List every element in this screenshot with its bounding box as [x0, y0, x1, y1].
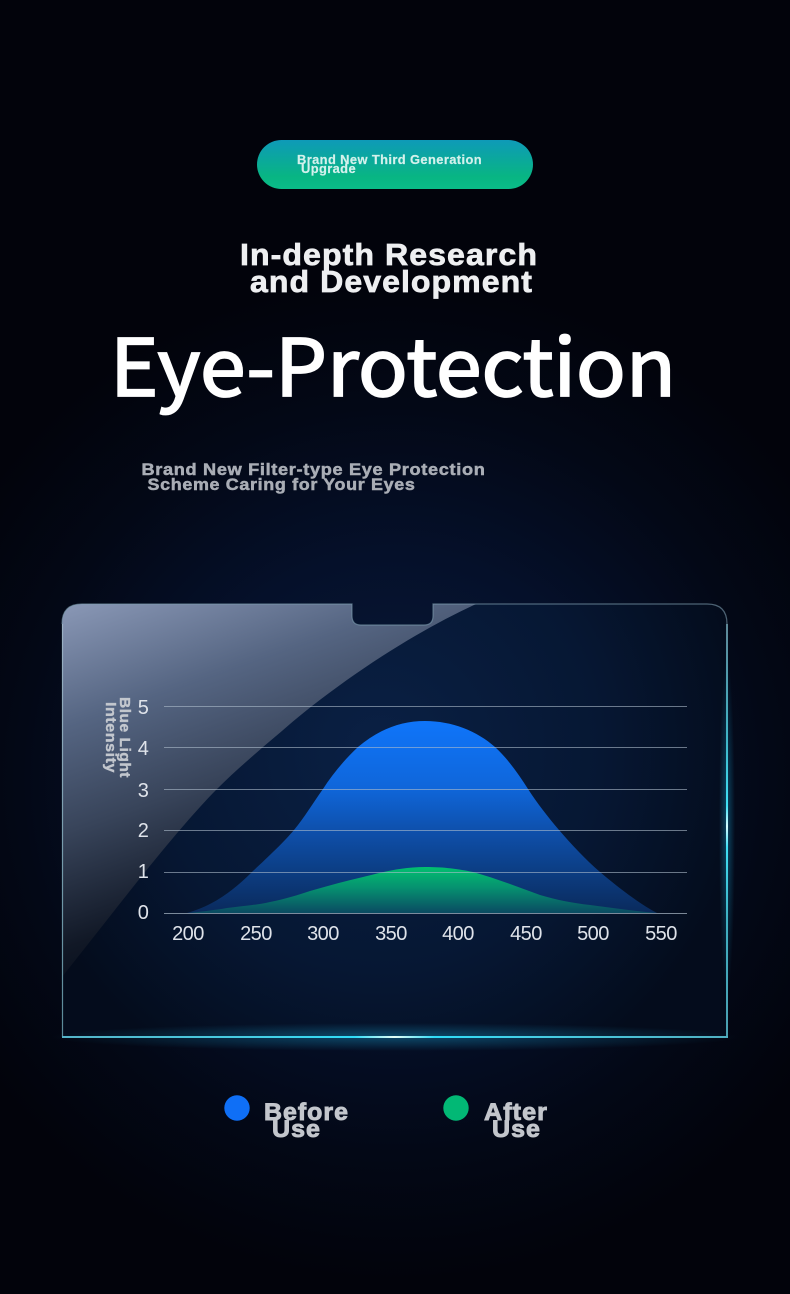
grid line 0	[164, 912, 687, 914]
title: eye-protection: Eye-Protection	[110, 304, 676, 419]
grid line 1	[164, 872, 687, 874]
y axis title	[102, 697, 133, 778]
x axis labels: 300	[307, 923, 339, 945]
legend: before use: Before	[264, 1099, 349, 1126]
x axis labels: 500	[577, 923, 609, 945]
x axis labels: 400	[442, 923, 474, 945]
grid line 4	[164, 746, 687, 748]
screen outline left	[62, 624, 64, 1037]
legend: after use	[443, 1095, 548, 1143]
panel: screen with chart	[50, 604, 740, 1051]
legend: before use	[224, 1095, 349, 1143]
y axis labels: 0	[138, 902, 149, 924]
legend: after use: Use	[492, 1116, 541, 1143]
y axis labels: 5	[138, 697, 149, 719]
area: before use	[187, 721, 657, 913]
subtitle: Brand New Filter-type Eye Protection	[142, 461, 486, 479]
heading: in-depth research and development	[240, 237, 538, 299]
area chart	[102, 697, 687, 945]
x axis labels: 200	[172, 923, 204, 945]
x axis labels: 450	[510, 923, 542, 945]
screen outline top	[62, 604, 727, 625]
y axis labels: 3	[138, 780, 149, 802]
x axis labels: 550	[645, 923, 677, 945]
heading: in-depth research and development: and Development	[250, 264, 533, 299]
y axis title: Intensity	[102, 702, 119, 773]
screen outline right	[726, 624, 728, 1038]
screen outline bottom	[62, 1036, 728, 1038]
badge: third generation upgrade	[257, 140, 533, 189]
subtitle	[142, 461, 486, 494]
area: after use	[190, 867, 657, 913]
subtitle: Scheme Caring for Your Eyes	[148, 476, 416, 494]
y axis labels: 4	[138, 738, 149, 760]
grid line 5	[164, 706, 687, 708]
bottom edge glow	[50, 1023, 740, 1051]
right edge glow	[719, 656, 735, 996]
legend: after use: After	[484, 1099, 548, 1126]
heading: in-depth research and development: In-depth Research	[240, 237, 538, 272]
badge: third generation upgrade: Brand New Third Generation	[297, 152, 482, 167]
glass reflection	[62, 604, 476, 977]
screen fill	[62, 604, 727, 1037]
y axis labels	[138, 697, 149, 924]
badge: third generation upgrade: Upgrade	[301, 161, 356, 176]
x axis labels: 250	[240, 923, 272, 945]
y axis labels: 2	[138, 820, 149, 842]
y axis labels: 1	[138, 861, 149, 883]
grid line 3	[164, 788, 687, 790]
x axis labels	[172, 923, 677, 945]
y axis title: Blue Light	[116, 697, 133, 778]
grid line 2	[164, 830, 687, 832]
legend: before use: Use	[272, 1116, 321, 1143]
x axis labels: 350	[375, 923, 407, 945]
